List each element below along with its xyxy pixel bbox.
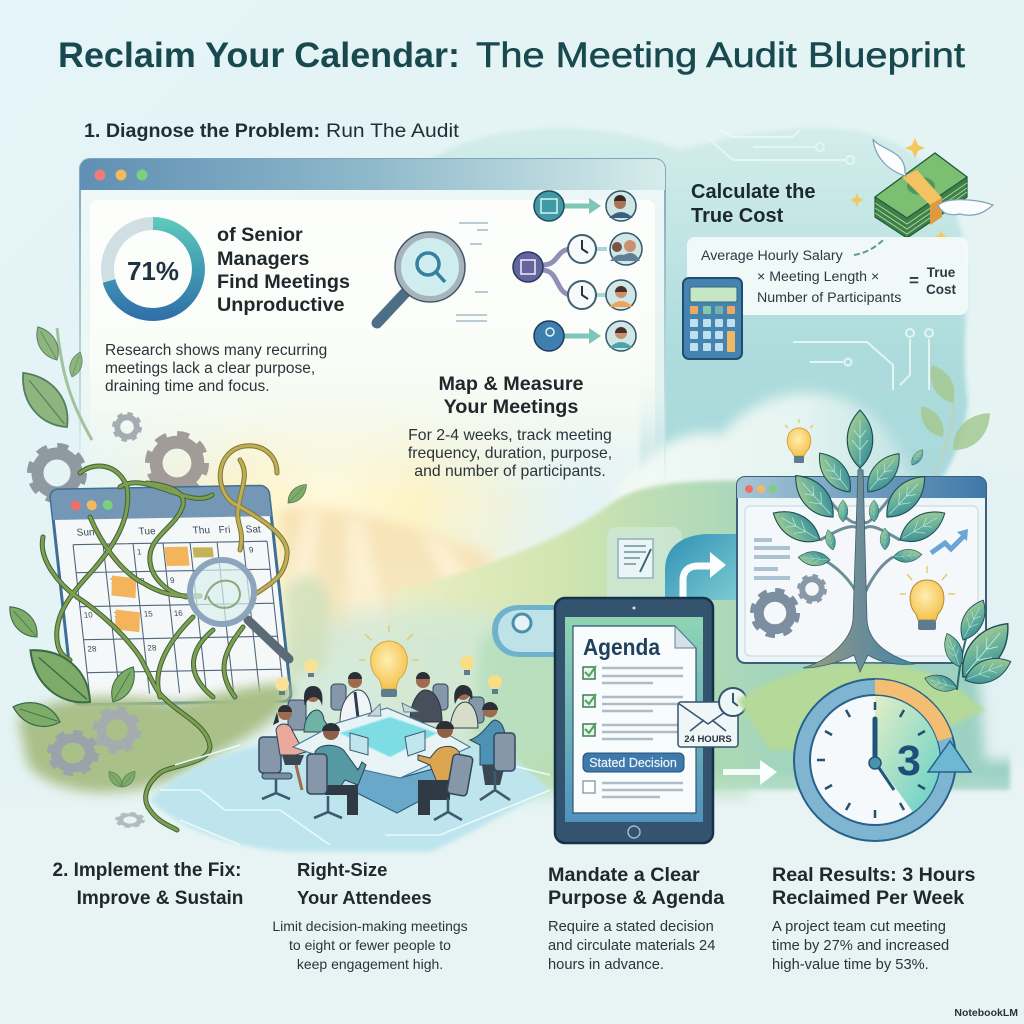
section heading: diagnose: Run The Audit bbox=[326, 120, 460, 142]
calendar window: 8 bbox=[140, 576, 146, 586]
circuit floor bbox=[150, 740, 550, 852]
lightbulbs over table bbox=[275, 625, 502, 697]
trunk and branches bbox=[820, 468, 900, 600]
stat text: of Senior bbox=[217, 224, 303, 246]
block: right-size attendees bbox=[272, 859, 468, 972]
icon: magnifying glass bbox=[377, 223, 488, 323]
heading: calculate the true cost: Calculate the bbox=[691, 181, 815, 203]
calendar window: Tue bbox=[138, 526, 157, 537]
panel: audit window bbox=[80, 159, 665, 490]
icon: lightbulbs bbox=[785, 419, 955, 630]
map and measure text bbox=[408, 427, 612, 480]
block: real results: high-value time by 53%. bbox=[772, 957, 929, 973]
donut chart: 71%: 71% bbox=[127, 256, 179, 286]
magnifier over calendar bbox=[190, 560, 289, 659]
title: Reclaim Your Calendar: bbox=[58, 36, 460, 75]
stat text: Find Meetings bbox=[217, 271, 350, 293]
formula card bbox=[687, 237, 968, 315]
ground and grass bbox=[18, 684, 295, 792]
vines bbox=[42, 446, 287, 830]
stat text bbox=[217, 224, 350, 316]
icon: calculator bbox=[683, 278, 742, 359]
icon: email 24 hours: 24 HOURS bbox=[684, 734, 732, 745]
calendar window: 15 bbox=[143, 609, 154, 619]
flow diagram: meeting mapping bbox=[513, 191, 642, 351]
calendar window: 14 bbox=[113, 610, 124, 619]
formula card: × Meeting Length × bbox=[757, 269, 879, 285]
panel: results window bbox=[737, 477, 986, 663]
calendar window: 28 bbox=[87, 644, 97, 654]
heading: calculate the true cost: True Cost bbox=[691, 205, 784, 227]
block: right-size attendees: Right-Size bbox=[297, 859, 387, 880]
map and measure text: For 2-4 weeks, track meeting bbox=[408, 427, 612, 444]
heading: map and measure: Your Meetings bbox=[444, 396, 578, 418]
calendar window: Sun bbox=[76, 527, 95, 539]
watermark: NotebookLM: NotebookLM bbox=[954, 1007, 1018, 1019]
calendar window: 28 bbox=[147, 643, 157, 653]
donut chart: 71% bbox=[108, 224, 198, 314]
stat text: Managers bbox=[217, 248, 309, 270]
faded plant behind window bbox=[915, 360, 998, 475]
formula card: True bbox=[927, 265, 956, 280]
calendar window: 9 bbox=[248, 545, 254, 555]
formula card: = bbox=[909, 271, 919, 290]
block: right-size attendees: to eight or fewer people to bbox=[289, 937, 451, 953]
block: mandate purpose: Require a stated decision bbox=[548, 919, 714, 935]
plant stem and leaves: upper left bbox=[11, 323, 92, 440]
man in yellow front bbox=[405, 721, 473, 820]
heading: implement the fix: Improve & Sustain bbox=[77, 888, 243, 909]
heading: implement the fix: 2. Implement the Fix: bbox=[53, 860, 241, 881]
icon: flying money bbox=[850, 138, 993, 244]
man in blue bbox=[470, 702, 515, 800]
block: mandate purpose: hours in advance. bbox=[548, 957, 664, 973]
calendar window: 16 bbox=[173, 609, 184, 618]
formula card: Average Hourly Salary bbox=[701, 248, 844, 264]
block: mandate purpose: Mandate a Clear bbox=[548, 864, 700, 886]
section heading: diagnose bbox=[84, 120, 460, 142]
illustration: growing tree bbox=[737, 360, 1019, 750]
arrow to clock bbox=[723, 760, 777, 785]
map and measure text: frequency, duration, purpose, bbox=[408, 445, 612, 462]
block: real results bbox=[772, 864, 976, 973]
research text: Research shows many recurring bbox=[105, 342, 327, 359]
block: real results: Real Results: 3 Hours bbox=[772, 864, 976, 886]
block: right-size attendees: keep engagement high. bbox=[297, 956, 443, 972]
map and measure text: and number of participants. bbox=[414, 463, 606, 480]
block: mandate purpose: and circulate materials 24 bbox=[548, 938, 715, 954]
block: mandate purpose: Purpose & Agenda bbox=[548, 887, 725, 909]
heading: map and measure: Map & Measure bbox=[438, 373, 584, 395]
tree leaves bbox=[767, 410, 951, 567]
illustration: team around table bbox=[150, 625, 550, 852]
calendar window: 7 bbox=[110, 577, 116, 586]
formula card: Cost bbox=[926, 282, 957, 297]
title bbox=[58, 36, 965, 75]
research text bbox=[105, 342, 327, 395]
tablet: agenda: Stated Decision bbox=[589, 756, 677, 770]
tablet: agenda bbox=[555, 598, 713, 843]
circuit lines bbox=[160, 745, 550, 845]
calendar window: Sat bbox=[245, 524, 262, 536]
gears behind calendar bbox=[32, 414, 204, 498]
research text: meetings lack a clear purpose, bbox=[105, 360, 315, 377]
formula card: Number of Participants bbox=[757, 290, 901, 306]
calendar window: 1 bbox=[136, 547, 142, 557]
stat text: Unproductive bbox=[217, 294, 344, 316]
plant bottom right bbox=[923, 596, 1019, 695]
heading: implement the fix bbox=[53, 860, 243, 909]
block: right-size attendees: Limit decision-making meetings bbox=[272, 918, 468, 934]
title: The Meeting Audit Blueprint bbox=[476, 36, 965, 75]
calendar window: 9 bbox=[170, 576, 176, 585]
hill under tree bbox=[737, 664, 985, 750]
calendar window: Thu bbox=[192, 525, 211, 537]
gears on ground bbox=[51, 710, 143, 827]
back row people bbox=[288, 672, 484, 732]
illustration: tangled calendar bbox=[3, 323, 330, 830]
illustration: doc card, pill and arrow bbox=[492, 527, 738, 657]
illustration: clock with 3 bbox=[794, 679, 971, 841]
block: real results: time by 27% and increased bbox=[772, 938, 949, 954]
heading: calculate the true cost bbox=[691, 181, 815, 227]
block: right-size attendees: Your Attendees bbox=[297, 887, 432, 908]
man in teal front bbox=[307, 723, 368, 818]
bush beside calendar bbox=[285, 576, 330, 680]
calendar window: 10 bbox=[83, 610, 94, 620]
calendar window: Fri bbox=[218, 525, 231, 536]
section heading: diagnose: 1. Diagnose the Problem: bbox=[84, 120, 320, 142]
calendar window bbox=[50, 486, 292, 705]
illustration: clock with 3: 3 bbox=[897, 737, 921, 785]
table bbox=[293, 703, 470, 813]
icon: email 24 hours bbox=[678, 688, 747, 747]
foreground leaves bbox=[3, 480, 311, 790]
research text: draining time and focus. bbox=[105, 378, 270, 395]
block: real results: A project team cut meeting bbox=[772, 919, 946, 935]
woman in pink bbox=[259, 705, 312, 799]
heading: map and measure bbox=[438, 373, 584, 418]
block: real results: Reclaimed Per Week bbox=[772, 887, 964, 909]
tablet: agenda: Agenda bbox=[583, 634, 660, 660]
block: mandate purpose bbox=[548, 864, 725, 973]
